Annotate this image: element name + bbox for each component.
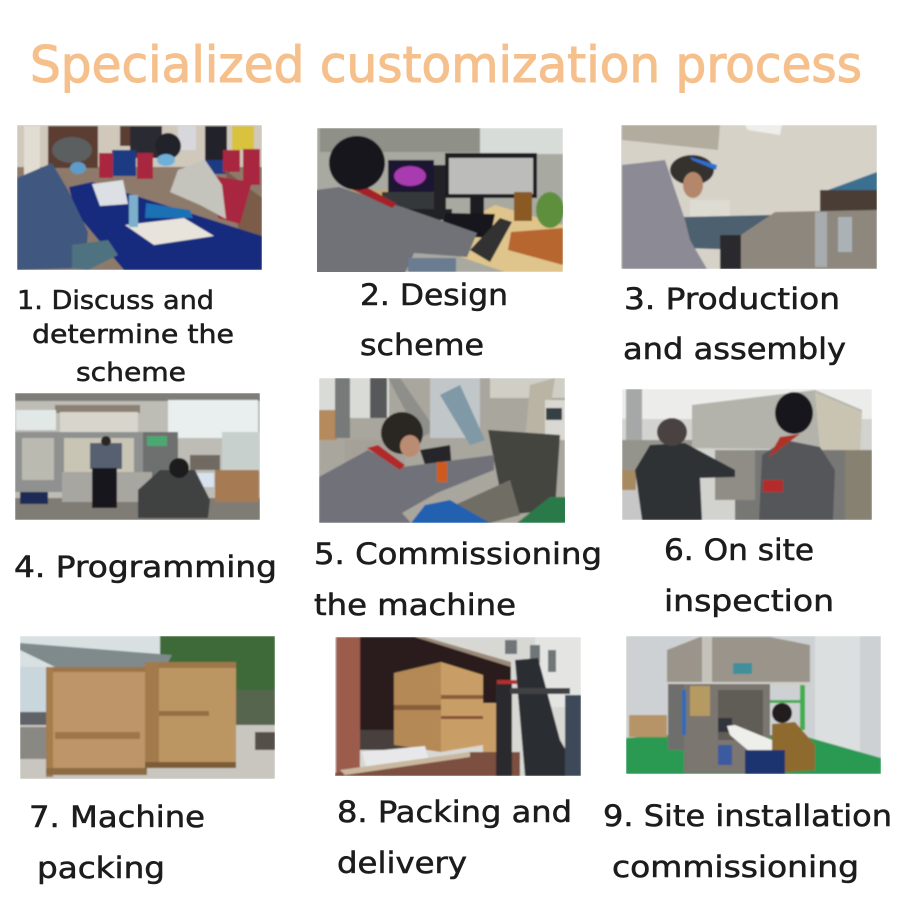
step 6 label: inspection (664, 584, 834, 618)
step 6 label: 6. On site (664, 533, 814, 567)
step 2 label: scheme (360, 328, 484, 362)
step 7 label: packing (37, 851, 165, 885)
title: Specialized customization process (30, 36, 862, 94)
step 3 label: 3. Production (624, 282, 840, 316)
step 3 label: and assembly (623, 332, 846, 366)
step 3 label (623, 282, 846, 366)
step 2 label: 2. Design (360, 278, 508, 312)
panel: step 8 packing and delivery (335, 637, 581, 880)
photo: two wooden crates (20, 636, 275, 779)
step 1 label: 1. Discuss and (17, 286, 214, 316)
panel: step 3 production (621, 125, 877, 366)
step 7 label (29, 800, 205, 885)
step 1 label: scheme (76, 358, 186, 388)
photo: crate loaded on truck with forklift (335, 637, 581, 776)
step 6 label (664, 533, 834, 618)
panel: step 6 on site inspection (622, 389, 872, 618)
step 9 label: commissioning (612, 850, 859, 884)
photo: worker adjusting machine (319, 378, 566, 523)
photo: programming in workshop (15, 393, 260, 520)
step 2 label (360, 278, 508, 362)
step 5 label: 5. Commissioning (314, 537, 602, 571)
photo: worker with metal parts (621, 125, 877, 269)
panel: step 9 site installation (603, 636, 892, 884)
photo: engineer at computer (316, 128, 564, 273)
step 1 label: determine the (32, 320, 234, 350)
step 8 label (337, 795, 572, 880)
panel: step 1 discuss (17, 125, 262, 388)
step 7 label: 7. Machine (29, 800, 205, 834)
step 1 label (17, 286, 234, 388)
panel: step 4 programming (14, 393, 277, 584)
step 4 label: 4. Programming (14, 550, 277, 584)
step 8 label: 8. Packing and (337, 795, 572, 829)
step 8 label: delivery (337, 846, 467, 880)
step 5 label (314, 537, 602, 622)
step 9 label (603, 799, 892, 884)
step 5 label: the machine (314, 588, 516, 622)
photo: technician installing machine (626, 636, 881, 774)
photo: two workers inspecting machine (622, 389, 872, 520)
panel: step 7 machine packing (20, 636, 275, 885)
panel: step 2 design (316, 128, 564, 362)
step 9 label: 9. Site installation (603, 799, 892, 833)
photo: meeting at blue table (17, 125, 262, 270)
panel: step 5 commissioning (314, 378, 602, 622)
